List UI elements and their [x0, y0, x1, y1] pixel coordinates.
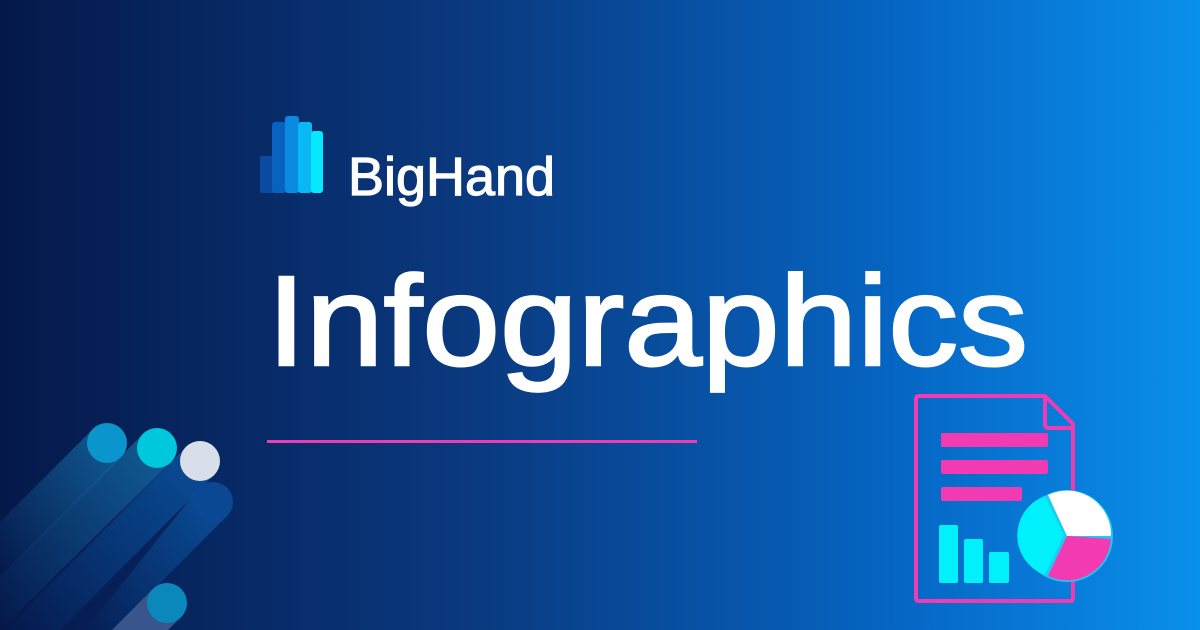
logo: BigHand: BigHand — [348, 147, 555, 207]
pink underline — [267, 440, 697, 443]
icon: pie chart — [1017, 490, 1113, 582]
decoration: flying circles — [0, 423, 233, 630]
logo: BigHand — [260, 116, 555, 207]
icon: document with charts — [916, 396, 1113, 601]
title: Infographics: Infographics — [267, 250, 1028, 393]
